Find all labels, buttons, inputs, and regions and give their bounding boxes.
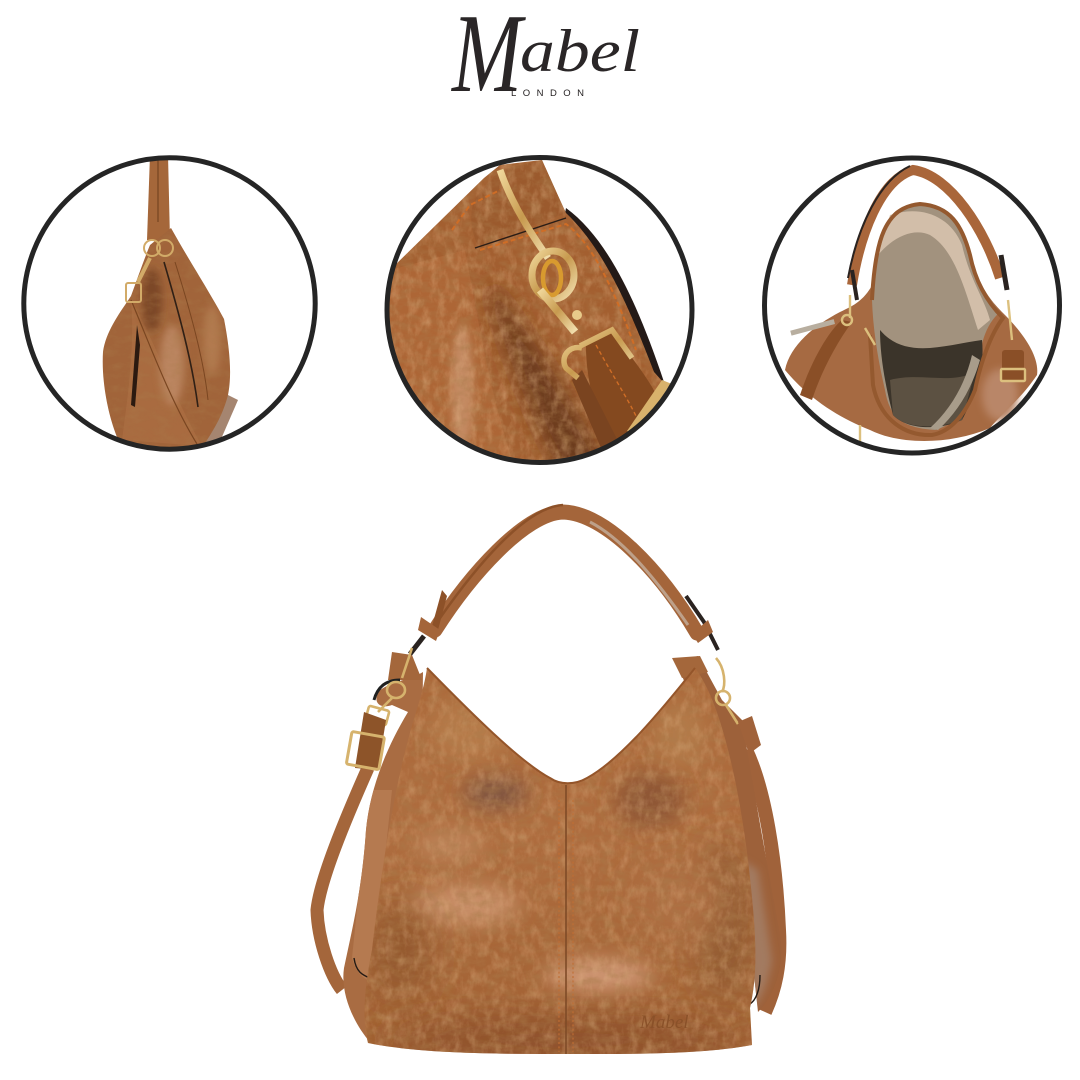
strap tab right — [738, 716, 761, 754]
top edge stitching — [427, 668, 695, 783]
hardware — [842, 295, 1025, 442]
circle ring — [764, 158, 1060, 453]
strap with buckle left — [355, 712, 386, 770]
main bag illustration — [317, 505, 781, 1070]
gusset top tabs — [388, 652, 422, 680]
panel: side view circle — [24, 155, 315, 455]
leather highlights and shadows — [370, 700, 751, 1062]
dark interior — [880, 330, 983, 427]
straps — [852, 270, 857, 300]
circle ring — [24, 158, 315, 449]
leather surface — [395, 160, 662, 460]
panel: hardware close-up circle — [380, 155, 692, 480]
gold buckle — [627, 380, 672, 435]
lining light — [872, 204, 1000, 430]
top handle — [435, 512, 697, 633]
hardware — [126, 240, 173, 302]
centre seam — [559, 785, 573, 1054]
front panel — [364, 669, 756, 1054]
close-up leather photo — [390, 160, 670, 460]
handle — [852, 170, 1000, 285]
rear strap — [206, 395, 238, 442]
left gusset — [343, 672, 423, 1042]
right gusset — [676, 656, 781, 1012]
gold ring and clasp — [500, 170, 632, 378]
logo subtitle: LONDON — [511, 88, 584, 99]
bag body exterior — [785, 203, 1037, 441]
embossed brand mark: Mabel — [639, 1012, 689, 1033]
circle ring — [387, 158, 692, 462]
shaded folds — [390, 160, 662, 460]
logo wordmark: abel — [520, 18, 640, 84]
bag side body — [103, 228, 230, 448]
hardware left — [365, 648, 412, 726]
strap — [586, 334, 654, 438]
side view bag photo — [95, 155, 238, 455]
panel: interior view circle — [764, 158, 1060, 453]
dark back edge — [565, 208, 664, 381]
logo: Mabel London — [450, 0, 640, 116]
shoulder strap left — [317, 768, 368, 990]
handle tabs and keepers — [431, 590, 447, 630]
leather texture — [367, 682, 755, 1054]
rim — [870, 204, 1003, 435]
dark slits — [131, 325, 140, 407]
handle — [147, 155, 170, 240]
shoulder strap right — [746, 750, 779, 1012]
interior bag photo — [785, 166, 1037, 442]
hardware right — [716, 658, 738, 724]
stitching — [452, 190, 636, 350]
